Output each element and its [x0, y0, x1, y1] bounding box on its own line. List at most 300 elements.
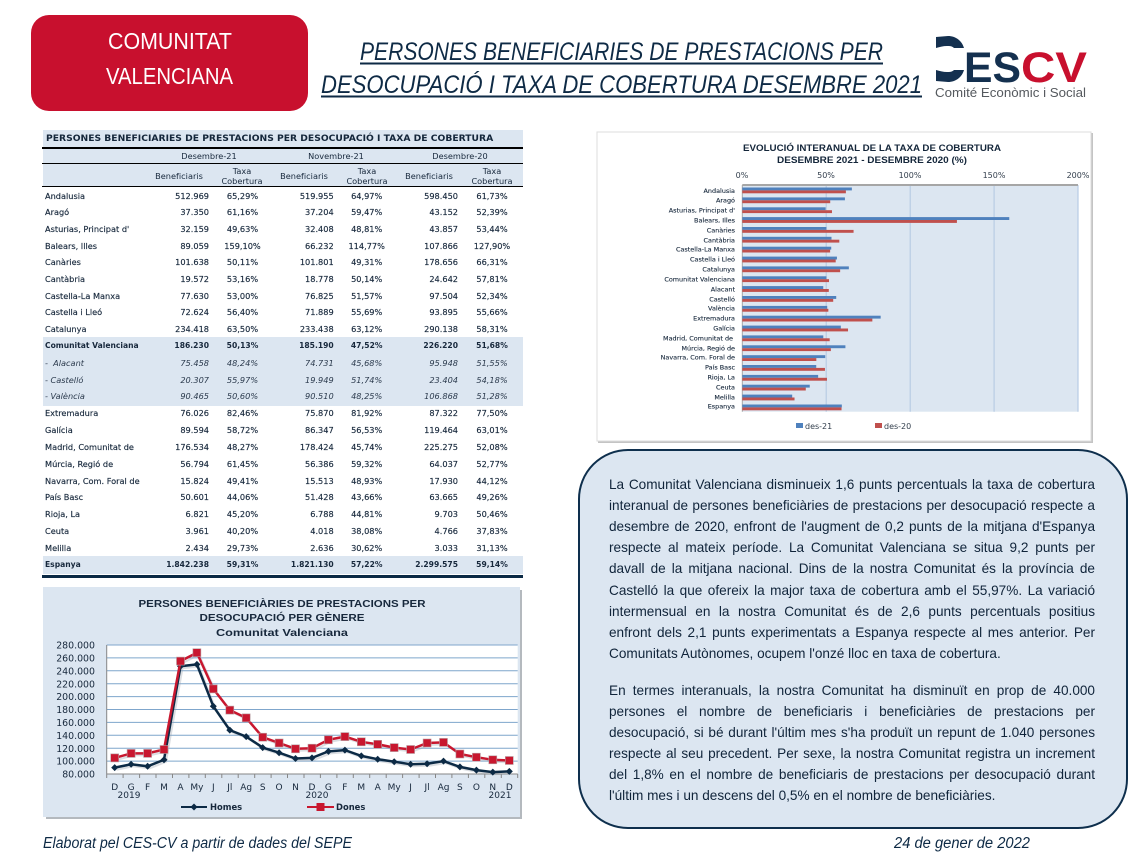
- row: País Basc: 44,06%: [227, 492, 258, 502]
- table title band: [43, 130, 523, 147]
- row: Castelló: - Castelló: [45, 374, 83, 384]
- row: Aragó: 59,47%: [351, 207, 382, 217]
- row: Castella i Lleó: 71.889: [305, 307, 334, 317]
- row: Cantàbria: [45, 274, 508, 284]
- table period header: Desembre-21: Desembre-21: [181, 151, 237, 161]
- x axis labels: A: [177, 783, 184, 793]
- row: Balears: Balears, Illes: [45, 240, 97, 250]
- paragraph 1: respecte al mateix període. La Comunitat Valenciana se situa 9,2 punts per: [609, 540, 1095, 555]
- paragraph 2: l'últim mes i un descens del 0,5% en el nombre de beneficiàries.: [609, 788, 995, 803]
- row: Navarra: 15.513: [305, 476, 334, 486]
- row: Rioja: Rioja, La: [45, 509, 80, 519]
- x axis labels: S: [260, 783, 266, 793]
- row: Asturias: 32.159: [180, 224, 209, 234]
- axis labels: 150%: [983, 171, 1006, 180]
- logo: CES-CV: ES: [964, 44, 1021, 92]
- y axis labels: 280.000: [56, 640, 95, 652]
- row: Comunitat Valenciana: [45, 341, 508, 350]
- x axis labels: J: [408, 783, 412, 793]
- row: Cantàbria: 24.642: [429, 274, 458, 284]
- commentary panel: [578, 449, 1128, 829]
- y axis labels: 240.000: [56, 666, 95, 678]
- main title: [321, 38, 922, 99]
- paragraph 1: desembre de 2020, enfront de l'augment de 0,2 punts de la mitjana d'Espanya: [609, 519, 1095, 534]
- plot area and gridlines: [742, 185, 1078, 412]
- row: Extremadura: 87.322: [429, 408, 458, 418]
- row: Rioja: 6.821: [186, 509, 209, 519]
- row: Extremadura: [45, 408, 508, 418]
- paragraph 2: persones el nombre de beneficiaris i beneficiàries de prestacions per: [609, 704, 1095, 719]
- x axis labels: Ag: [438, 783, 449, 793]
- category labels: País Basc: [705, 364, 735, 372]
- row: Alacant: 48,24%: [227, 358, 258, 368]
- table period header: Desembre-20: Desembre-20: [432, 151, 488, 161]
- row: País Basc: 50.601: [180, 492, 209, 502]
- axis labels: 100%: [899, 171, 922, 180]
- row: Castella i Lleó: 93.895: [429, 307, 458, 317]
- category labels: Alacant: [711, 286, 735, 294]
- badge: Comunitat Valenciana: VALENCIANA: [106, 63, 234, 89]
- bars: des-21: [742, 188, 1009, 407]
- row: Múrcia: 52,77%: [476, 458, 508, 468]
- line chart panel: beneficiaries by gender: [43, 587, 522, 819]
- category labels: Cantàbria: [704, 236, 735, 244]
- row: País Basc: País Basc: [45, 492, 83, 502]
- x axis labels: O: [276, 783, 283, 793]
- paragraph 1: enfront dels 2,1 punts experimentats a Espanya respecte al mes anterior. Per: [609, 625, 1095, 640]
- x axis labels: F: [342, 783, 347, 793]
- row: Aragó: 52,39%: [476, 207, 508, 217]
- row: Navarra: 17.930: [429, 476, 458, 486]
- row: Ceuta: 40,20%: [227, 526, 258, 536]
- column header: Taxa: [358, 166, 376, 176]
- line shadow: [117, 655, 511, 774]
- row: Canàries: Canàries: [45, 257, 81, 267]
- y axis labels: 220.000: [56, 680, 95, 690]
- x axis labels: Jl: [226, 783, 232, 793]
- row: Comunitat Valenciana: 186.230: [174, 341, 209, 350]
- row: Catalunya: 233.438: [300, 324, 334, 334]
- row: Extremadura: 76.026: [180, 408, 209, 418]
- category labels: Asturias, Principat d': [669, 206, 735, 214]
- row: Castella-La Manxa: 76.825: [305, 290, 334, 300]
- category labels: Galícia: [713, 324, 735, 332]
- row: Castelló: [45, 374, 508, 384]
- category labels: Rioja, La: [707, 374, 735, 382]
- bar chart panel: evolució interanual: [597, 132, 1093, 443]
- logo: CES-CV: Comité Econòmic i Social: [935, 86, 1086, 100]
- paragraph 1: interanual de persones beneficiàries de prestacions per desocupació respecte a: [609, 498, 1095, 513]
- row: Espanya: 1.821.130: [291, 560, 334, 568]
- category labels: Castelló: [709, 296, 735, 304]
- chart title: PERSONES BENEFICIÀRIES DE PRESTACIONS PER: [138, 597, 426, 610]
- row: Castella i Lleó: 55,69%: [351, 307, 382, 317]
- x axis labels: 2021: [489, 791, 511, 801]
- row: Madrid: [45, 442, 508, 452]
- chart title: [138, 597, 426, 639]
- row: Andalusia: 61,73%: [476, 191, 508, 201]
- y axis labels: 140.000: [56, 731, 95, 742]
- x axis labels: N: [292, 783, 299, 793]
- row: Madrid: 52,08%: [476, 442, 508, 452]
- column header: [221, 166, 263, 186]
- row: Melilla: 29,73%: [227, 542, 258, 552]
- x axis labels: D: [309, 783, 316, 793]
- paragraph 2: respecte al seu precedent. Per sexe, la nostra Comunitat registra un increment: [609, 746, 1095, 761]
- row: Galícia: 63,01%: [476, 425, 508, 435]
- paragraph 2: desocupació, si bé durant l'últim mes s'ha produït un repunt de 1.040 persones: [609, 725, 1095, 740]
- row: Balears: 127,90%: [474, 240, 510, 250]
- row: Ceuta: 4.766: [435, 526, 458, 536]
- row: Aragó: Aragó: [45, 207, 69, 217]
- main title: PERSONES BENEFICIARIES DE PRESTACIONS PER: [360, 38, 883, 66]
- date: 24 de gener de 2022: [893, 835, 1030, 852]
- column header: Beneficiaris: [155, 171, 203, 181]
- column header: [346, 166, 388, 186]
- row: Cantàbria: 50,14%: [351, 274, 382, 284]
- row: Catalunya: 58,31%: [476, 324, 508, 334]
- row: València: 106.868: [424, 391, 458, 401]
- row: Asturias: 48,81%: [351, 224, 382, 234]
- x axis labels: F: [145, 783, 150, 793]
- table comunitat valenciana band: [43, 337, 523, 406]
- row: Madrid: 48,27%: [227, 442, 258, 452]
- row: València: 90.510: [305, 391, 334, 401]
- row: Navarra: 15.824: [180, 476, 209, 486]
- category labels: Canàries: [707, 226, 736, 234]
- row: Melilla: [45, 542, 508, 552]
- paragraph 2: del 1,8% en el nombre de beneficiaris de prestacions per desocupació durant: [609, 767, 1095, 782]
- row: Asturias: [45, 224, 508, 234]
- row: València: [45, 391, 508, 401]
- row: Múrcia: Múrcia, Regió de: [45, 458, 113, 468]
- row: Castelló: 51,74%: [351, 374, 382, 384]
- source note: Elaborat pel CES-CV a partir de dades del SEPE: [43, 835, 353, 852]
- row: Andalusia: 519.955: [300, 191, 334, 201]
- row: Comunitat Valenciana: 185.190: [299, 341, 334, 350]
- x axis labels: My: [388, 783, 401, 793]
- row: Cantàbria: 19.572: [180, 274, 209, 284]
- row: Espanya: 1.842.238: [166, 560, 209, 568]
- row: Asturias: 49,63%: [227, 224, 258, 234]
- row: Castella i Lleó: Castella i Lleó: [45, 307, 102, 317]
- row: Balears: 114,77%: [348, 240, 385, 250]
- row: Catalunya: 63,50%: [227, 324, 258, 334]
- row: Múrcia: 59,32%: [351, 458, 382, 468]
- row: Asturias: Asturias, Principat d': [45, 224, 129, 234]
- row: Ceuta: 3.961: [186, 526, 209, 536]
- row: Aragó: 43.152: [429, 207, 458, 217]
- row: Extremadura: 82,46%: [227, 408, 258, 418]
- table period header: Novembre-21: Novembre-21: [308, 151, 364, 161]
- row: Canàries: 49,31%: [351, 257, 382, 267]
- row: Melilla: 2.636: [310, 542, 334, 552]
- row: Alacant: - Alacant: [45, 358, 84, 368]
- chart legend: [796, 422, 911, 431]
- x axis labels: My: [190, 783, 204, 793]
- category labels: Melilla: [714, 394, 735, 402]
- row: València: 90.465: [180, 391, 209, 401]
- row: Andalusia: 598.450: [424, 191, 458, 201]
- row: Ceuta: Ceuta: [45, 526, 69, 536]
- row: Asturias: 53,44%: [476, 224, 508, 234]
- row: Extremadura: 77,50%: [476, 408, 508, 418]
- paragraph 2: En termes interanuals, la nostra Comunitat ha disminuït en prop de 40.000: [609, 683, 1095, 698]
- y axis labels: 100.000: [56, 756, 95, 768]
- chart title: EVOLUCIÓ INTERANUAL DE LA TAXA DE COBERTURA: [743, 142, 1001, 154]
- x axis labels: D: [111, 783, 118, 793]
- row: Ceuta: 4.018: [310, 526, 334, 536]
- x axis labels: M: [160, 783, 168, 793]
- y axis labels: 80.000: [62, 770, 95, 780]
- row: Espanya: 59,14%: [476, 560, 508, 568]
- row: Espanya: 59,31%: [227, 560, 258, 568]
- row: Galícia: Galícia: [45, 425, 73, 435]
- y axis labels: [56, 640, 95, 780]
- x axis labels: O: [473, 783, 480, 793]
- x axis labels: Jl: [424, 783, 430, 793]
- paragraph 1: [609, 477, 1096, 661]
- column header: Cobertura: [471, 176, 513, 186]
- row: Galícia: 119.464: [424, 425, 458, 435]
- row: Comunitat Valenciana: 47,52%: [351, 341, 382, 350]
- row: Galícia: 86.347: [305, 425, 334, 435]
- y axis labels: 120.000: [56, 744, 95, 755]
- chart title: DESOCUPACIÓ PER GÈNERE: [200, 611, 364, 624]
- row: Espanya: [45, 560, 508, 568]
- bars: des-20: [742, 190, 957, 410]
- row: Madrid: 178.424: [300, 442, 334, 452]
- row: Extremadura: 75.870: [305, 408, 334, 418]
- paragraph 1: intermensual en la nostra Comunitat és de 2,6 punts percentuals positius: [609, 604, 1095, 619]
- category labels: València: [708, 304, 735, 312]
- row: Melilla: 31,13%: [476, 542, 508, 552]
- category labels: Catalunya: [702, 266, 735, 274]
- row: Madrid: Madrid, Comunitat de: [45, 442, 134, 452]
- y axis labels: 180.000: [56, 705, 95, 716]
- row: Comunitat Valenciana: Comunitat Valenciana: [45, 341, 139, 350]
- row: Castella i Lleó: 56,40%: [227, 307, 258, 317]
- row: València: 48,25%: [351, 391, 382, 401]
- chart title: [743, 142, 1001, 166]
- row: Castella i Lleó: 55,66%: [476, 307, 508, 317]
- column header: Beneficiaris: [280, 171, 328, 181]
- row: Alacant: 45,68%: [351, 358, 382, 368]
- row: Castella-La Manxa: 52,34%: [476, 290, 508, 300]
- row: Extremadura: 81,92%: [351, 408, 382, 418]
- row: Catalunya: 63,12%: [351, 324, 382, 334]
- row: Melilla: Melilla: [45, 542, 71, 552]
- line: Homes: [115, 664, 509, 772]
- row: Espanya: Espanya: [45, 560, 81, 568]
- row: Galícia: 56,53%: [351, 425, 382, 435]
- row: Castella-La Manxa: Castella-La Manxa: [45, 290, 120, 300]
- x axis labels: G: [128, 783, 135, 793]
- badge: Comunitat Valenciana: COMUNITAT: [108, 28, 232, 54]
- row: Castella-La Manxa: [45, 290, 508, 300]
- row: Madrid: 45,74%: [351, 442, 382, 452]
- row: Extremadura: Extremadura: [45, 408, 98, 418]
- row: Cantàbria: 18.778: [305, 274, 334, 284]
- row: Navarra: Navarra, Com. Foral de: [45, 476, 140, 486]
- row: Espanya: 57,22%: [351, 560, 382, 568]
- row: Canàries: 178.656: [424, 257, 458, 267]
- row: Catalunya: [45, 324, 508, 334]
- row: València: 50,60%: [227, 391, 258, 401]
- row: Navarra: 49,41%: [227, 476, 258, 486]
- category labels: Comunitat Valenciana: [664, 276, 735, 284]
- column header: Cobertura: [346, 176, 388, 186]
- legend: [181, 802, 365, 812]
- table title band: PERSONES BENEFICIARIES DE PRESTACIONS PER DESOCUPACIÓ I TAXA DE COBERTURA: [46, 133, 493, 144]
- category labels: Balears, Illes: [694, 216, 736, 224]
- row: Balears: 89.059: [180, 240, 209, 250]
- row: València: - València: [45, 391, 85, 401]
- legend: Dones: [336, 802, 365, 812]
- axis labels: 0%: [736, 171, 749, 180]
- row: Castella i Lleó: 72.624: [180, 307, 209, 317]
- column header: Beneficiaris: [405, 171, 453, 181]
- row: Canàries: 50,11%: [227, 257, 258, 267]
- row: Castelló: 23.404: [429, 374, 458, 384]
- axis labels: 200%: [1067, 171, 1090, 180]
- axis labels: 50%: [817, 171, 835, 180]
- row: Catalunya: 290.138: [424, 324, 458, 334]
- x axis labels: A: [375, 783, 382, 793]
- row: Madrid: 225.275: [424, 442, 458, 452]
- paragraph 1: Castelló la que ofereix la major taxa de cobertura amb el 55,97%. La variació: [609, 582, 1095, 598]
- row: Castella-La Manxa: 51,57%: [351, 290, 382, 300]
- row: Rioja: 44,81%: [351, 509, 382, 519]
- row: Castella-La Manxa: 53,00%: [227, 290, 258, 300]
- row: Aragó: 61,16%: [227, 207, 258, 217]
- row: Múrcia: 56.386: [305, 458, 334, 468]
- row: Comunitat Valenciana: 50,13%: [227, 341, 258, 350]
- row: Madrid: 176.534: [175, 442, 209, 452]
- row: Melilla: 2.434: [186, 542, 209, 552]
- row: País Basc: [45, 492, 508, 502]
- x axis labels: M: [357, 783, 365, 793]
- table header band: [43, 148, 523, 186]
- column header: Taxa: [233, 166, 251, 176]
- row: Múrcia: 64.037: [429, 458, 458, 468]
- row: Alacant: [45, 358, 508, 368]
- x axis labels: G: [325, 783, 332, 793]
- category labels: Castella i Lleó: [690, 256, 735, 264]
- chart legend: des-20: [884, 422, 911, 431]
- row: Andalusia: Andalusia: [45, 191, 85, 201]
- x axis labels: 2020: [306, 791, 329, 801]
- row: Balears: 107.866: [424, 240, 458, 250]
- row: Canàries: 101.638: [175, 257, 209, 267]
- x axis labels: [111, 783, 513, 801]
- row: Cantàbria: 57,81%: [476, 274, 508, 284]
- logo: CES-CV: [935, 36, 1087, 100]
- row: Aragó: 37.350: [180, 207, 209, 217]
- row: Balears: 66.232: [305, 240, 334, 250]
- row: País Basc: 51.428: [305, 492, 334, 502]
- row: País Basc: 43,66%: [351, 492, 382, 502]
- y axis labels: 260.000: [56, 654, 95, 664]
- row: Rioja: 9.703: [435, 509, 458, 519]
- row: Andalusia: [45, 191, 508, 201]
- row: Rioja: [45, 509, 508, 519]
- row: Galícia: [45, 425, 508, 435]
- row: Andalusia: 64,97%: [351, 191, 382, 201]
- row: Canàries: [45, 257, 508, 267]
- x axis labels: 2019: [118, 791, 141, 801]
- x axis labels: S: [457, 783, 463, 793]
- row: Melilla: 30,62%: [351, 542, 382, 552]
- row: Castelló: 54,18%: [476, 374, 508, 384]
- row: Galícia: 89.594: [180, 425, 209, 435]
- row: Castella-La Manxa: 97.504: [429, 290, 458, 300]
- row: País Basc: 49,26%: [476, 492, 508, 502]
- logo: CES-CV: CV: [1021, 44, 1087, 92]
- row: Espanya: 2.299.575: [415, 560, 458, 568]
- row: Aragó: 37.204: [305, 207, 334, 217]
- row: Castelló: 20.307: [180, 374, 209, 384]
- row: Andalusia: 65,29%: [227, 191, 258, 201]
- plot area and gridlines: [107, 645, 518, 778]
- row: Castella-La Manxa: 77.630: [180, 290, 209, 300]
- row: Asturias: 43.857: [429, 224, 458, 234]
- x axis labels: Ag: [240, 783, 252, 793]
- row: Múrcia: [45, 458, 508, 469]
- category labels: Madrid, Comunitat de: [663, 334, 733, 342]
- row: País Basc: 63.665: [429, 492, 458, 502]
- row: Balears: 159,10%: [224, 240, 261, 250]
- row: València: 51,28%: [476, 391, 508, 401]
- category labels: Navarra, Com. Foral de: [661, 354, 735, 362]
- column header: Taxa: [483, 166, 501, 176]
- row: Ceuta: [45, 526, 508, 536]
- y axis labels: 200.000: [56, 692, 95, 703]
- row: Comunitat Valenciana: 226.220: [423, 341, 458, 350]
- row: Rioja: 45,20%: [227, 509, 258, 519]
- chart title: Comunitat Valenciana: [216, 627, 348, 639]
- column header: [471, 166, 513, 186]
- paragraph 1: Comunitats Autònomes, ocupem l'onzé lloc en taxa de cobertura.: [609, 646, 1001, 661]
- row: Navarra: 48,93%: [351, 476, 382, 486]
- row: Canàries: 66,31%: [476, 257, 508, 267]
- row: Melilla: 3.033: [435, 542, 458, 552]
- chart title: DESEMBRE 2021 - DESEMBRE 2020 (%): [777, 155, 967, 166]
- row: Navarra: 44,12%: [476, 476, 508, 486]
- chart legend: des-21: [805, 422, 832, 431]
- row: Comunitat Valenciana: 51,68%: [476, 341, 508, 350]
- row: Balears: [45, 240, 510, 250]
- row: Alacant: 95.948: [429, 358, 458, 368]
- x axis labels: N: [489, 783, 496, 793]
- x axis labels: D: [506, 783, 513, 793]
- row: Aragó: [45, 207, 508, 217]
- row: Asturias: 32.408: [305, 224, 334, 234]
- row: Canàries: 101.801: [300, 257, 334, 267]
- x axis labels: J: [211, 783, 215, 793]
- row: Catalunya: Catalunya: [45, 324, 86, 334]
- legend: Homes: [210, 802, 242, 812]
- y axis labels: 160.000: [56, 718, 95, 729]
- row: Ceuta: 38,08%: [351, 526, 382, 536]
- category labels: Castella-La Manxa: [676, 246, 735, 254]
- main title: DESOCUPACIÓ I TAXA DE COBERTURA DESEMBRE 2021: [321, 70, 922, 99]
- category labels: [661, 187, 736, 410]
- category labels: Espanya: [708, 402, 735, 410]
- row: Galícia: 58,72%: [227, 425, 258, 435]
- row: Múrcia: 61,45%: [227, 458, 258, 468]
- row: Castelló: 19.949: [305, 374, 334, 384]
